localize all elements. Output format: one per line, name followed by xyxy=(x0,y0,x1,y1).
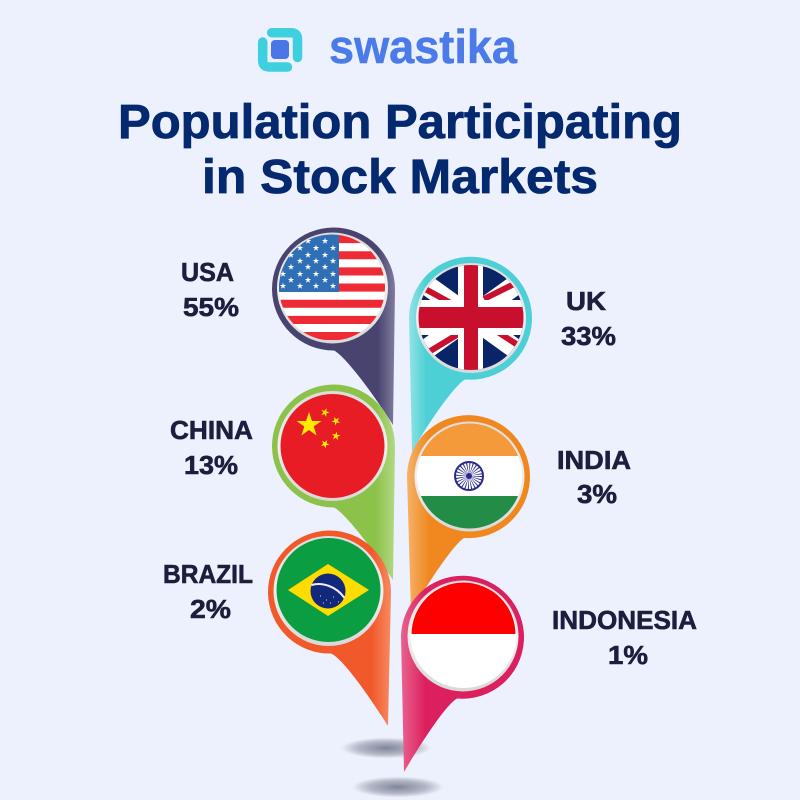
pin: USA xyxy=(272,228,395,425)
label: China xyxy=(170,415,253,480)
logo xyxy=(263,20,518,73)
pin shadow: right xyxy=(350,776,446,798)
pin: Indonesia xyxy=(401,576,524,772)
label: China: CHINA xyxy=(170,415,253,445)
title xyxy=(118,96,682,204)
pin: UK xyxy=(409,256,532,452)
title: Population Participating xyxy=(118,96,682,149)
label: UK: UK xyxy=(566,286,606,316)
icon: swastika logo mark xyxy=(263,33,298,67)
label: USA: USA xyxy=(181,257,234,287)
flag: China xyxy=(280,393,386,499)
pin: India xyxy=(407,415,530,612)
label: USA xyxy=(181,257,239,322)
logo wordmark: swastika xyxy=(329,20,518,73)
label: Indonesia: 1% xyxy=(608,640,648,670)
label: Indonesia: INDONESIA xyxy=(552,605,697,635)
label: China: 13% xyxy=(184,450,238,480)
label: India: 3% xyxy=(577,479,617,509)
flag: USA xyxy=(278,234,386,342)
label: Brazil: BRAZIL xyxy=(163,559,253,589)
pin shadow: left xyxy=(339,737,433,759)
label: Brazil: 2% xyxy=(190,594,231,624)
pin: China xyxy=(272,385,395,580)
label: India xyxy=(557,445,631,509)
label: USA: 55% xyxy=(183,292,239,322)
flag: Brazil xyxy=(276,537,382,643)
label: Indonesia xyxy=(552,605,697,670)
flag: UK xyxy=(418,265,524,370)
title: in Stock Markets xyxy=(202,151,598,204)
pin: Brazil xyxy=(268,531,391,726)
label: UK xyxy=(561,286,616,351)
label: Brazil xyxy=(163,559,253,624)
label: UK: 33% xyxy=(561,321,616,351)
flag: Indonesia xyxy=(410,582,516,688)
label: India: INDIA xyxy=(557,445,631,475)
flag: India xyxy=(416,423,524,529)
